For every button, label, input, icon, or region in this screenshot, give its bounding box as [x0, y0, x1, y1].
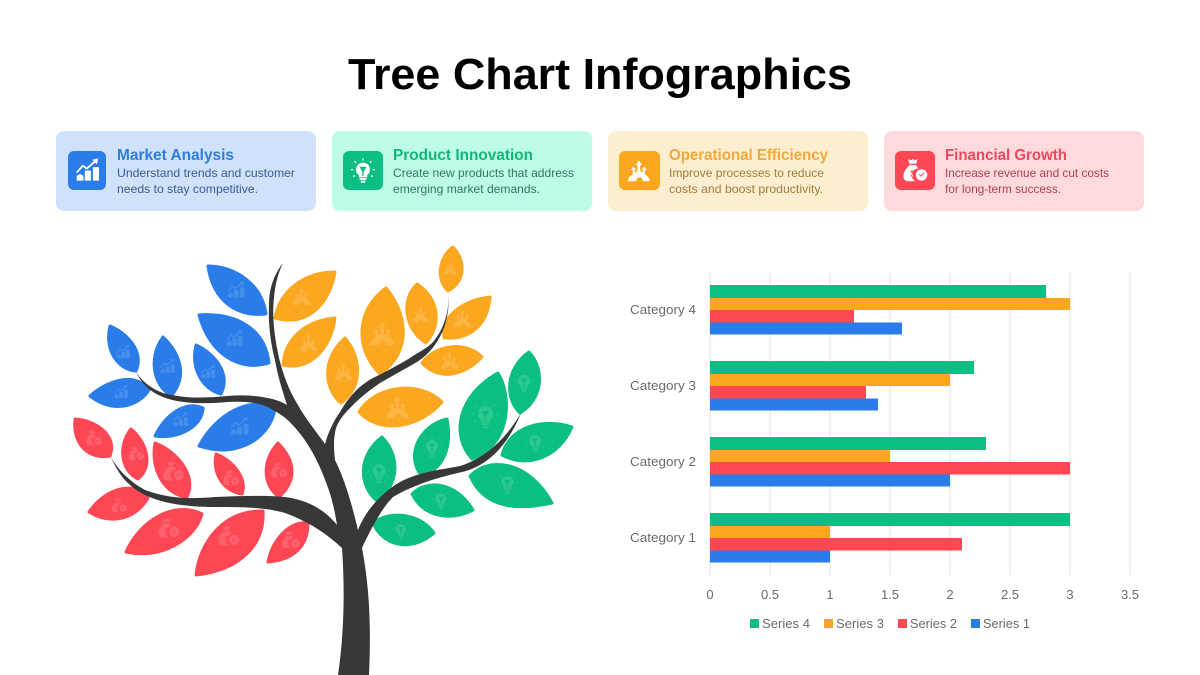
- leaf cluster: orange: [275, 247, 490, 426]
- heading: market analysis: Market Analysis: [117, 147, 234, 164]
- tree trunk and branches: [111, 263, 521, 675]
- green leaf 5: [363, 437, 395, 501]
- category axis labels: Category 2: [630, 454, 696, 469]
- red leaf 8: [196, 511, 263, 575]
- red leaf 4: [215, 454, 243, 494]
- green leaf 1: [460, 373, 506, 459]
- red leaf 1: [75, 419, 112, 457]
- panel: financial growth: [884, 131, 1144, 211]
- leaf cluster: blue: [90, 266, 275, 450]
- leaf cluster: red: [75, 419, 308, 575]
- text: operational efficiency description: costs and boost productivity.: [669, 182, 823, 196]
- blue leaf 6: [90, 379, 149, 406]
- green leaf 3: [502, 423, 572, 461]
- text: operational efficiency description: [669, 166, 824, 196]
- orange leaf 9: [359, 388, 442, 426]
- blue leaf 7: [155, 406, 203, 437]
- chart legend: Series 2: [910, 616, 957, 631]
- chart legend: [750, 616, 1030, 631]
- icon: arrows and castle: [619, 151, 660, 190]
- blue leaf 1: [208, 266, 266, 314]
- chart legend: Series 4: [762, 616, 810, 631]
- bar chart: [630, 272, 1139, 631]
- value axis labels: 2.5: [1001, 587, 1019, 602]
- panel: operational efficiency: [608, 131, 868, 211]
- text: operational efficiency description: Improve processes to reduce: [669, 166, 824, 180]
- tree illustration: [75, 247, 572, 675]
- heading: product innovation: Product Innovation: [393, 147, 533, 164]
- orange leaf 4: [362, 288, 403, 374]
- text: financial growth description: [945, 166, 1109, 196]
- text: market analysis description: needs to stay competitive.: [117, 182, 258, 196]
- category axis labels: [630, 302, 696, 545]
- category axis labels: Category 3: [630, 378, 696, 393]
- orange leaf 7: [444, 297, 490, 338]
- icon: money bag: [895, 151, 935, 190]
- category axis labels: Category 4: [630, 302, 696, 317]
- chart legend: Series 3: [836, 616, 884, 631]
- value axis labels: 2: [946, 587, 954, 602]
- red leaf 7: [126, 509, 202, 554]
- red leaf 2: [123, 429, 147, 479]
- leaf cluster: green: [363, 352, 572, 545]
- bars: category 3: [710, 361, 974, 410]
- green leaf 8: [373, 515, 434, 545]
- orange leaf 3: [328, 338, 358, 403]
- heading: financial growth: Financial Growth: [945, 147, 1067, 164]
- text: product innovation description: Create new products that address: [393, 166, 574, 180]
- orange leaf 8: [422, 347, 482, 374]
- green leaf 4: [414, 419, 449, 475]
- orange leaf 1: [275, 272, 335, 320]
- heading: operational efficiency: Operational Efficiency: [669, 147, 828, 164]
- orange leaf 5: [407, 284, 436, 343]
- red leaf 9: [268, 523, 308, 562]
- blue leaf 5: [195, 345, 224, 394]
- text: product innovation description: [393, 166, 574, 196]
- value axis labels: 3: [1066, 587, 1074, 602]
- red leaf 6: [89, 488, 148, 519]
- value axis labels: 1: [826, 587, 834, 602]
- value axis labels: 1.5: [881, 587, 899, 602]
- blue leaf 2: [199, 315, 269, 365]
- icon: light bulb: [343, 151, 383, 190]
- bars: category 4: [710, 285, 1070, 334]
- red leaf 3: [154, 443, 190, 497]
- text: financial growth description: for long-term success.: [945, 182, 1061, 196]
- green leaf 7: [470, 464, 552, 507]
- value axis labels: 0: [706, 587, 714, 602]
- category axis labels: Category 1: [630, 530, 696, 545]
- blue leaf 4: [154, 337, 181, 395]
- bars: category 2: [710, 437, 1070, 486]
- text: product innovation description: emerging market demands.: [393, 182, 540, 196]
- value axis labels: 3.5: [1121, 587, 1139, 602]
- value axis labels: [706, 587, 1139, 602]
- blue leaf 8: [199, 404, 275, 450]
- chart legend: Series 1: [983, 616, 1030, 631]
- icon: rising bar chart: [68, 151, 106, 190]
- green leaf 6: [412, 485, 473, 516]
- title: Tree Chart Infographics: [348, 50, 852, 99]
- blue leaf 3: [109, 326, 138, 371]
- value axis labels: 0.5: [761, 587, 779, 602]
- text: financial growth description: Increase revenue and cut costs: [945, 166, 1109, 180]
- green leaf 2: [510, 352, 540, 413]
- orange leaf 2: [283, 318, 335, 366]
- text: market analysis description: [117, 166, 295, 196]
- red leaf 5: [266, 443, 292, 497]
- panel: product innovation: [332, 131, 592, 211]
- panel: market analysis: [56, 131, 316, 211]
- bars: category 1: [710, 513, 1070, 562]
- text: market analysis description: Understand trends and customer: [117, 166, 295, 180]
- orange leaf 6: [440, 247, 462, 291]
